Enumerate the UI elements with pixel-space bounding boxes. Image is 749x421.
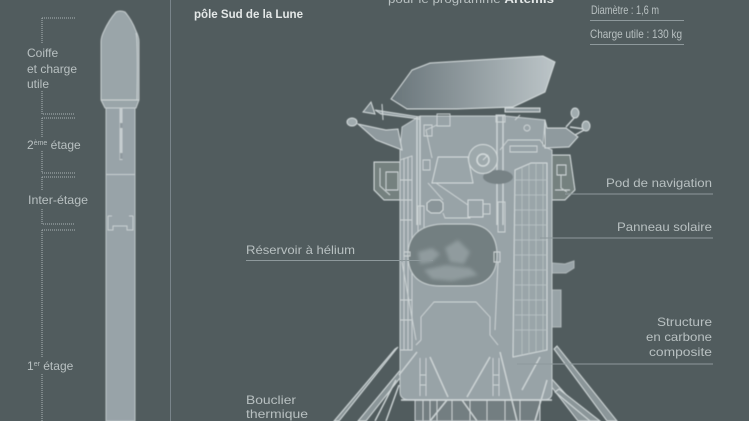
lander <box>334 56 617 421</box>
leader: structure: composite <box>649 345 712 359</box>
label: inter-etage: Inter-étage <box>28 193 88 207</box>
rocket <box>101 11 139 421</box>
box <box>432 157 473 183</box>
leader: structure: Structure <box>657 315 712 329</box>
navigation circle <box>468 144 498 174</box>
solar antenna <box>391 56 555 109</box>
lower structure <box>415 400 540 421</box>
label: 2e etage: ème <box>34 140 47 147</box>
lower chamber <box>416 302 498 345</box>
label: 2e etage: 2 <box>27 138 34 152</box>
leader: structure: en carbone <box>646 330 712 344</box>
lower struts <box>375 352 552 421</box>
body <box>400 116 552 400</box>
label: bouclier: Bouclier <box>246 393 296 407</box>
rocket stage scale <box>42 18 75 421</box>
spec: diametre: Diamètre : 1,6 m <box>591 3 659 17</box>
helium tank <box>408 224 497 286</box>
spec: charge utile: Charge utile : 130 kg <box>590 27 682 41</box>
label: bouclier <box>246 393 308 421</box>
left solar strip <box>400 156 412 350</box>
label: 2e etage: étage <box>47 138 81 152</box>
label: coiffe: utile <box>27 77 49 91</box>
arms <box>347 102 590 150</box>
divider <box>170 0 172 421</box>
label: coiffe: et charge <box>27 62 77 76</box>
label: coiffe: Coiffe <box>27 46 58 60</box>
leader: structure <box>517 315 713 364</box>
pods <box>374 162 402 200</box>
leader: reservoir: Réservoir à hélium <box>246 243 355 257</box>
label: bouclier: thermique <box>246 407 308 421</box>
legs behind <box>334 346 617 421</box>
label: 1er etage: er <box>34 361 41 368</box>
leader: pod de navigation: Pod de navigation <box>606 176 712 190</box>
label: 1er etage: étage <box>40 359 74 373</box>
shadow <box>483 170 513 184</box>
structure struts <box>417 116 503 225</box>
leader: panneau solaire: Panneau solaire <box>617 220 712 234</box>
heading left: pôle Sud de la Lune <box>194 7 303 21</box>
solar panel <box>513 163 547 357</box>
label: 1er etage: 1 <box>27 359 34 373</box>
